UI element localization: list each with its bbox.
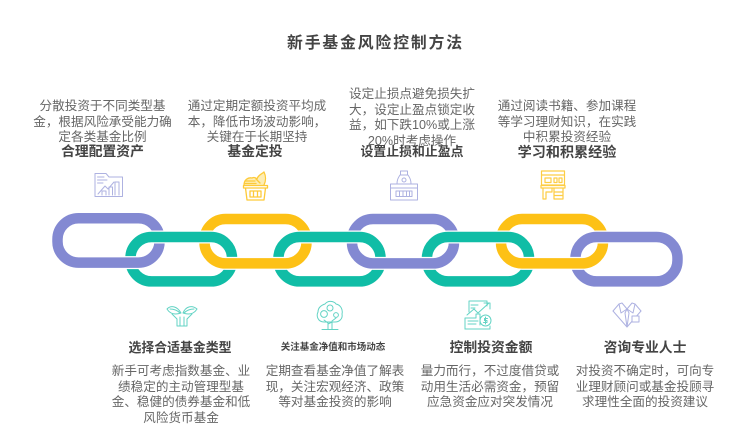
text block: 选择合适基金类型 description: 新手可考虑指数基金、业 <box>112 364 250 378</box>
icon: sprout <box>166 306 198 326</box>
text block: 关注基金净值和市场动态 description: 现，关注宏观经济、政策 <box>266 380 404 394</box>
text block: 设置止损和止盈点 description: 益，如下跌10%或上涨 <box>349 118 475 132</box>
text block: 基金定投 description: 关键在于长期坚持 <box>207 130 307 144</box>
icon: bottle on safe <box>390 170 418 200</box>
heading: 基金定投: 基金定投 <box>227 144 283 159</box>
text block: 咨询专业人士 description <box>576 364 714 409</box>
text block: 基金定投 description: 本，降低市场波动影响， <box>188 114 326 128</box>
text block: 学习和积累经验 description: 等学习理财知识，在实践 <box>498 114 636 128</box>
panel: 学习和积累经验 <box>498 99 636 160</box>
text block: 合理配置资产 description: 金，根据风险承受能力确 <box>33 114 172 128</box>
text block: 选择合适基金类型 description: 绩稳定的主动管理型基 <box>118 380 244 394</box>
text block: 咨询专业人士 description: 业理财顾问或基金投顾寻 <box>576 380 714 394</box>
text block: 咨询专业人士 description: 求理性全面的投资建议 <box>582 395 708 409</box>
text block: 设置止损和止盈点 description: 设定止损点避免损失扩 <box>349 87 475 101</box>
text block: 控制投资金额 description: 应急资金应对突发情况 <box>427 395 553 409</box>
panel: 选择合适基金类型 <box>112 340 250 424</box>
text block: 关注基金净值和市场动态 description: 定期查看基金净值了解表 <box>266 364 404 378</box>
title: 新手基金风险控制方法 <box>287 35 464 52</box>
heading: 选择合适基金类型: 选择合适基金类型 <box>128 340 232 355</box>
upper links, back layer <box>58 218 603 263</box>
text block: 合理配置资产 description <box>33 99 172 144</box>
text block: 控制投资金额 description: 动用生活必需资金，预留 <box>421 380 559 394</box>
text block: 合理配置资产 description: 分散投资于不同类型基 <box>40 99 165 113</box>
icon: folder with rising bar chart <box>94 173 123 197</box>
icon: rising arrow with coin <box>464 300 492 330</box>
chain of eight interlocking links <box>52 213 683 287</box>
text block: 选择合适基金类型 description <box>112 364 250 424</box>
icon: basket of coins <box>242 171 268 201</box>
upper link bottoms passing over lower links <box>54 250 608 270</box>
text block: 学习和积累经验 description: 中积累投资经验 <box>523 130 611 144</box>
heading: 关注基金净值和市场动态: 关注基金净值和市场动态 <box>281 342 385 353</box>
icon: money tree <box>316 300 343 330</box>
text block: 设置止损和止盈点 description <box>349 87 475 148</box>
text block: 设置止损和止盈点 description: 20%时考虑操作 <box>368 134 456 148</box>
text block: 基金定投 description: 通过定期定额投资平均成 <box>188 99 326 113</box>
heading: 控制投资金额: 控制投资金额 <box>450 340 532 355</box>
panel: 控制投资金额 <box>421 340 559 409</box>
heading: 学习和积累经验: 学习和积累经验 <box>518 144 616 160</box>
text block: 控制投资金额 description: 量力而行，不过度借贷或 <box>421 364 559 378</box>
text block: 关注基金净值和市场动态 description: 等对基金投资的影响 <box>278 395 392 409</box>
heading: 设置止损和止盈点: 设置止损和止盈点 <box>360 144 464 159</box>
text block: 咨询专业人士 description: 对投资不确定时，可向专 <box>576 364 714 378</box>
lower links with white outline <box>130 237 678 281</box>
text block: 基金定投 description <box>188 99 326 144</box>
text block: 学习和积累经验 description <box>498 99 636 144</box>
text block: 学习和积累经验 description: 通过阅读书籍、参加课程 <box>498 99 636 113</box>
heading: 合理配置资产: 合理配置资产 <box>61 144 144 159</box>
panel: 基金定投 <box>188 99 326 159</box>
text block: 关注基金净值和市场动态 description <box>266 364 404 409</box>
panel: 关注基金净值和市场动态 <box>266 342 404 409</box>
text block: 控制投资金额 description <box>421 364 559 409</box>
panel: 设置止损和止盈点 <box>349 87 475 159</box>
text block: 选择合适基金类型 description: 金、稳健的债券基金和低 <box>112 395 250 409</box>
text block: 合理配置资产 description: 定各类基金比例 <box>58 130 147 144</box>
text block: 选择合适基金类型 description: 风险货币基金 <box>143 410 219 424</box>
panel: 合理配置资产 <box>33 99 172 159</box>
icon: suit collar and pocket <box>612 302 642 328</box>
heading: 咨询专业人士: 咨询专业人士 <box>604 340 686 355</box>
panel: 咨询专业人士 <box>576 340 714 409</box>
icon: bookshelf desk <box>540 170 566 200</box>
text block: 设置止损和止盈点 description: 大，设定止盈点锁定收 <box>349 102 475 116</box>
